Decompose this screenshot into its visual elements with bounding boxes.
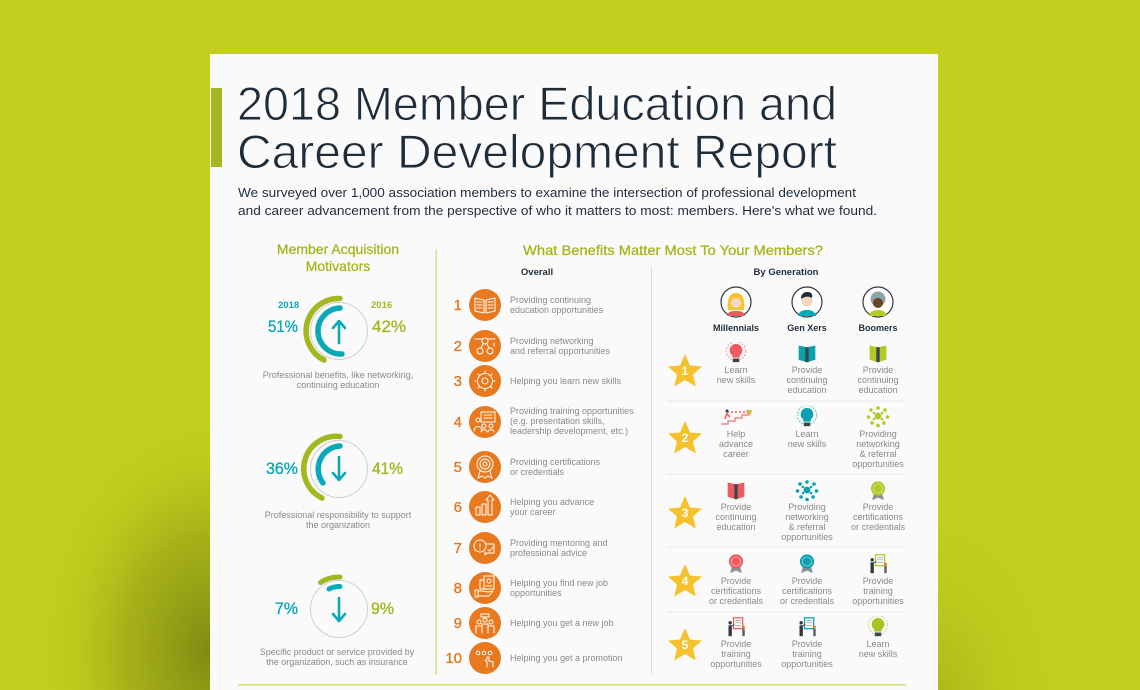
rank 2 row: career bbox=[723, 449, 749, 459]
icon: career path bbox=[721, 410, 752, 424]
rank 5 row bbox=[668, 616, 898, 669]
rank 1 row: continuing bbox=[786, 375, 828, 385]
chart: professional benefits: 2018 bbox=[278, 300, 299, 311]
icon: bulb bbox=[797, 406, 817, 426]
rank 4 row bbox=[668, 554, 904, 606]
rank 5 row: Learn bbox=[866, 639, 890, 649]
icon: network bbox=[867, 406, 889, 427]
icon: bulb bbox=[726, 342, 746, 362]
rank 2 row: opportunities bbox=[852, 459, 904, 469]
row 7: Providing mentoring and bbox=[510, 538, 608, 548]
heading: what benefits matter most: What Benefits Matter Most To Your Members? bbox=[523, 242, 823, 258]
icon: training bbox=[870, 555, 887, 573]
page shadow: left bbox=[0, 400, 210, 690]
chart: professional benefits: 51% bbox=[268, 318, 298, 336]
icon: training bbox=[728, 618, 745, 636]
rank 4 row: opportunities bbox=[852, 596, 904, 606]
rank 5 row: Provide bbox=[792, 639, 822, 649]
row 6: Helping you advance bbox=[510, 497, 594, 507]
avatar: boomers bbox=[858, 287, 898, 333]
icon: star 2: 2 bbox=[682, 431, 689, 445]
row 9: Helping you get a new job bbox=[510, 618, 614, 628]
chart: specific product or service: the organization, such as insurance bbox=[266, 657, 408, 667]
rank 1 row: new skills bbox=[717, 375, 756, 385]
row 5 bbox=[454, 451, 601, 483]
row 6: your career bbox=[510, 507, 556, 517]
rank 1 row: education bbox=[787, 385, 827, 395]
rank 2 row: & referral bbox=[859, 449, 897, 459]
title accent bar bbox=[211, 88, 222, 167]
chart: professional benefits: continuing education bbox=[297, 380, 379, 390]
row 8: Helping you find new job bbox=[510, 578, 608, 588]
rank 5 row: opportunities bbox=[710, 659, 762, 669]
heading: by generation: By Generation bbox=[754, 267, 819, 278]
rank 1 row: Provide bbox=[863, 365, 893, 375]
intro text bbox=[238, 186, 877, 218]
row 3: 3 bbox=[454, 373, 462, 390]
rank 3 row bbox=[668, 480, 906, 542]
rank 3 row: Providing bbox=[788, 502, 826, 512]
rank 4 row: certifications bbox=[711, 586, 762, 596]
icon: book bbox=[870, 346, 886, 362]
rank 3 row: Provide bbox=[863, 502, 893, 512]
rank 5 row: training bbox=[721, 649, 751, 659]
row 4: leadership development, etc.) bbox=[510, 426, 628, 436]
rank 3 row: continuing bbox=[715, 512, 757, 522]
rank 2 row: advance bbox=[719, 439, 753, 449]
icon: star 3: 3 bbox=[682, 506, 689, 520]
chart: professional benefits: 2016 bbox=[371, 300, 392, 311]
icon: badge bbox=[871, 481, 885, 500]
title: Career Development Report bbox=[237, 125, 837, 178]
chart: professional responsibility bbox=[265, 436, 412, 530]
rank 3 row: opportunities bbox=[781, 532, 833, 542]
chart: professional responsibility: 36% bbox=[266, 460, 298, 478]
row 7 bbox=[454, 532, 608, 564]
rank 1 row: continuing bbox=[857, 375, 899, 385]
row 1: Providing continuing bbox=[510, 295, 591, 305]
avatar: gen xers bbox=[787, 287, 827, 333]
rank 2 row: Providing bbox=[859, 429, 897, 439]
icon: star 3 bbox=[668, 496, 702, 528]
row 7: 7 bbox=[454, 540, 462, 557]
title bbox=[237, 77, 837, 178]
rank 2 row: Help bbox=[727, 429, 745, 439]
rank 4 row: Provide bbox=[792, 576, 822, 586]
avatar: millennials bbox=[713, 287, 759, 333]
icon: star 1 bbox=[668, 354, 702, 386]
title: 2018 Member Education and bbox=[237, 77, 837, 130]
chart: professional benefits bbox=[263, 298, 413, 390]
icon: star 4: 4 bbox=[682, 574, 689, 588]
rank 2 row: networking bbox=[856, 439, 900, 449]
dividers bbox=[238, 249, 906, 686]
row 4: 4 bbox=[454, 414, 462, 431]
rank 2 row: new skills bbox=[788, 439, 827, 449]
panel: member acquisition motivators bbox=[260, 241, 415, 667]
row 8 bbox=[454, 572, 608, 604]
rank 3 row: & referral bbox=[788, 522, 826, 532]
chart: professional responsibility: 41% bbox=[372, 460, 403, 478]
rank 4 row: certifications bbox=[782, 586, 833, 596]
heading: motivators: Member Acquisition bbox=[277, 241, 399, 257]
panel: overall ranking bbox=[445, 267, 634, 674]
icon: star 5 bbox=[668, 628, 702, 660]
row 9 bbox=[454, 607, 614, 639]
row 5: 5 bbox=[454, 459, 462, 476]
rank 4 row: or credentials bbox=[780, 596, 835, 606]
icon: star 4 bbox=[668, 564, 702, 596]
chart: specific product or service: 9% bbox=[371, 600, 394, 618]
rank 4 row: Provide bbox=[863, 576, 893, 586]
avatar: millennials: Millennials bbox=[713, 323, 759, 333]
icon: badge bbox=[800, 554, 814, 573]
intro text: We surveyed over 1,000 association members to examine the intersection of professional development bbox=[238, 186, 857, 200]
row 1: education opportunities bbox=[510, 305, 604, 315]
row 10: 10 bbox=[445, 650, 462, 667]
rank 3 row: Provide bbox=[721, 502, 751, 512]
rank 3 row: networking bbox=[785, 512, 829, 522]
row 1 bbox=[454, 289, 604, 321]
row 10: Helping you get a promotion bbox=[510, 653, 623, 663]
icon: book bbox=[799, 346, 815, 362]
row 3: Helping you learn new skills bbox=[510, 376, 622, 386]
heading: overall: Overall bbox=[521, 267, 553, 278]
row 2: Providing networking bbox=[510, 336, 594, 346]
row 7: professional advice bbox=[510, 548, 587, 558]
row 3 bbox=[454, 365, 622, 397]
rank 1 row: Learn bbox=[724, 365, 748, 375]
rank 5 row: Provide bbox=[721, 639, 751, 649]
avatar: boomers: Boomers bbox=[858, 323, 898, 333]
row 2: 2 bbox=[454, 338, 462, 355]
icon: star 2 bbox=[668, 421, 702, 454]
icon: star 5: 5 bbox=[682, 638, 689, 652]
row 4 bbox=[454, 406, 634, 438]
row 5: Providing certifications bbox=[510, 457, 601, 467]
icon: star 1: 1 bbox=[682, 364, 689, 378]
icon: bulb bbox=[868, 616, 888, 636]
intro text: and career advancement from the perspective of who it matters to most: members. Here's what we found. bbox=[238, 204, 877, 218]
row 4: Providing training opportunities bbox=[510, 406, 634, 416]
rank 3 row: education bbox=[716, 522, 756, 532]
rank 4 row: training bbox=[863, 586, 893, 596]
icon: book bbox=[728, 482, 744, 499]
heading: motivators: Motivators bbox=[306, 258, 370, 274]
row dividers bbox=[667, 400, 906, 613]
rank 2 row: Learn bbox=[795, 429, 819, 439]
avatar: gen xers: Gen Xers bbox=[787, 323, 827, 333]
report page bbox=[210, 54, 938, 690]
icon: network bbox=[796, 480, 818, 501]
chart: specific product or service: 7% bbox=[275, 600, 298, 618]
icon: badge bbox=[729, 554, 743, 573]
row 2: and referral opportunities bbox=[510, 346, 611, 356]
row 8: 8 bbox=[454, 580, 462, 597]
row 10 bbox=[445, 642, 623, 674]
rank 5 row: training bbox=[792, 649, 822, 659]
rank 1 row bbox=[668, 342, 899, 395]
chart: professional responsibility: the organization bbox=[306, 520, 370, 530]
icon: training bbox=[800, 618, 816, 636]
row 2 bbox=[454, 330, 611, 362]
row 4: (e.g. presentation skills, bbox=[510, 416, 605, 426]
chart: professional benefits: Professional benefits, like networking, bbox=[263, 370, 413, 380]
rank 3 row: certifications bbox=[853, 512, 904, 522]
rank 4 row: Provide bbox=[721, 576, 751, 586]
row 1: 1 bbox=[454, 297, 462, 314]
row 6 bbox=[454, 491, 594, 523]
panel: by generation bbox=[667, 267, 906, 669]
rank 1 row: Provide bbox=[792, 365, 822, 375]
chart: specific product or service bbox=[260, 577, 415, 667]
chart: professional benefits: 42% bbox=[372, 318, 406, 336]
rank 1 row: education bbox=[858, 385, 898, 395]
chart: professional responsibility: Professional responsibility to support bbox=[265, 510, 412, 520]
rank 4 row: or credentials bbox=[709, 596, 764, 606]
row 9: 9 bbox=[454, 615, 462, 632]
rank 5 row: new skills bbox=[859, 649, 898, 659]
rank 5 row: opportunities bbox=[781, 659, 833, 669]
rank 3 row: or credentials bbox=[851, 522, 906, 532]
row 8: opportunities bbox=[510, 588, 562, 598]
row 6: 6 bbox=[454, 499, 462, 516]
page shadow: right bbox=[938, 490, 1078, 690]
row 5: or credentials bbox=[510, 467, 565, 477]
rank 2 row bbox=[668, 406, 904, 469]
chart: specific product or service: Specific product or service provided by bbox=[260, 647, 415, 657]
